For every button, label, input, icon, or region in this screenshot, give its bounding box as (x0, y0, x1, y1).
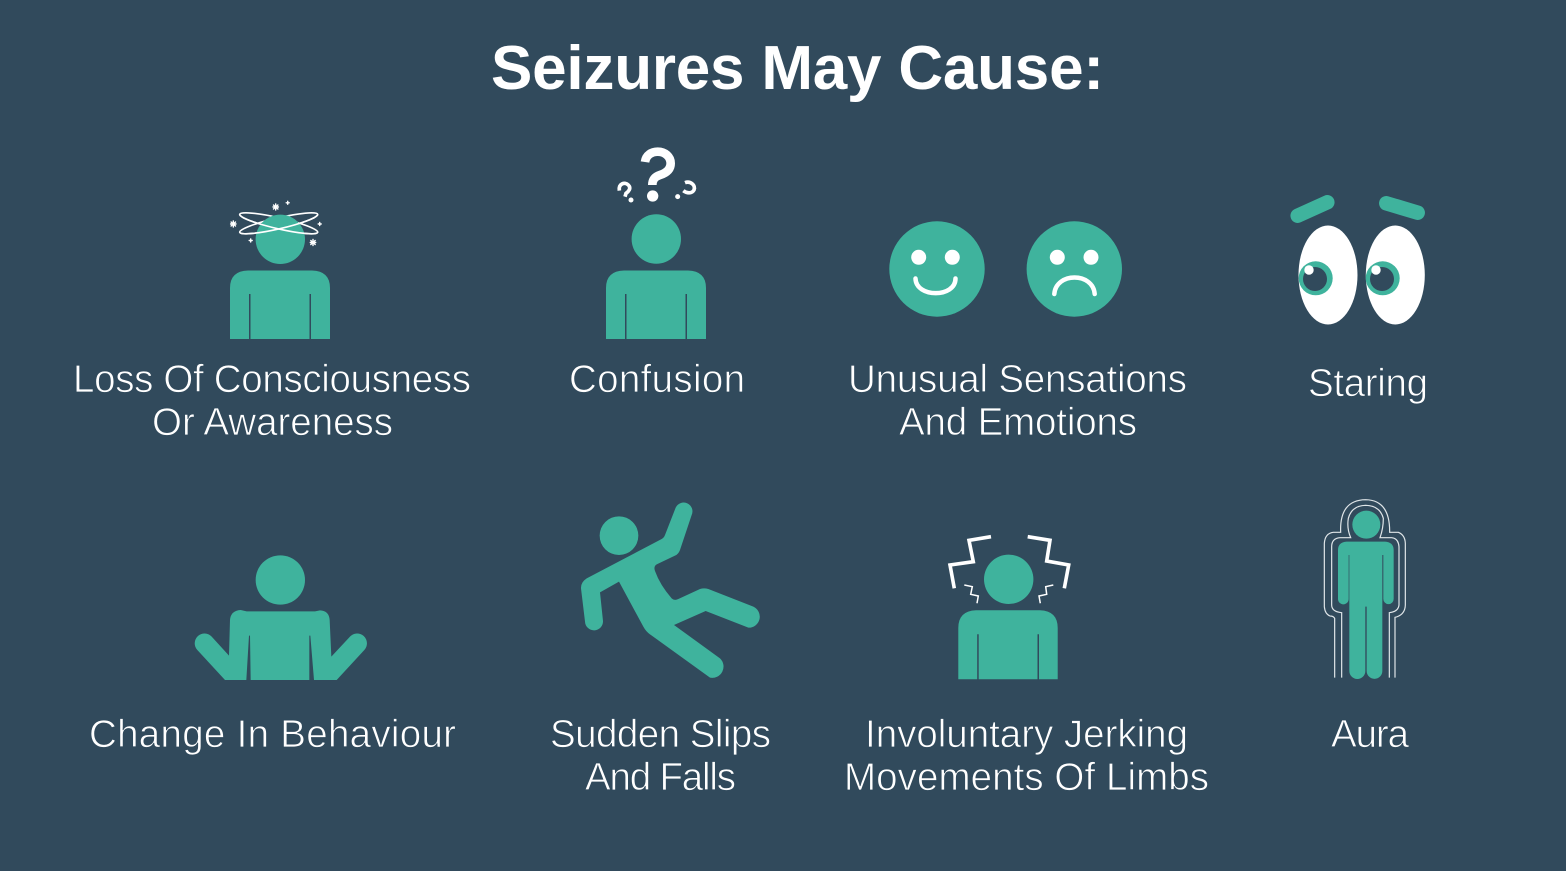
label: sudden slips and falls (550, 713, 771, 799)
panel: loss of consciousness (73, 201, 471, 444)
panel: aura (1324, 500, 1410, 756)
icon: person with aura outline (1324, 500, 1405, 679)
panel: unusual sensations (848, 221, 1187, 444)
label: loss of consciousness (73, 358, 471, 444)
icon: falling person (581, 503, 760, 678)
label: loss of consciousness: Loss Of Consciousness (73, 358, 471, 401)
icon: staring eyes (1298, 202, 1425, 324)
label: change in behaviour: Change In Behaviour (89, 713, 456, 756)
panel: confusion (569, 152, 745, 401)
label: confusion: Confusion (569, 358, 745, 401)
title: Seizures May Cause: (491, 34, 1104, 103)
icon: happy and sad faces (889, 221, 1122, 317)
icon: shrugging person (195, 555, 367, 680)
label: aura: Aura (1331, 713, 1410, 756)
label: involuntary jerking: Movements Of Limbs (844, 756, 1209, 799)
label: sudden slips and falls: Sudden Slips (550, 713, 771, 756)
label: loss of consciousness: Or Awareness (152, 401, 393, 444)
label: involuntary jerking (844, 713, 1209, 799)
label: unusual sensations: Unusual Sensations (848, 358, 1187, 401)
panel: staring (1298, 202, 1428, 405)
icon: person with jolts (950, 537, 1069, 679)
label: involuntary jerking: Involuntary Jerking (865, 713, 1188, 756)
icon: person with question marks (606, 152, 706, 339)
panel: involuntary jerking (844, 537, 1209, 799)
label: staring: Staring (1308, 362, 1428, 405)
label: sudden slips and falls: And Falls (585, 756, 736, 799)
label: unusual sensations (848, 358, 1187, 444)
icon: person with dizzy head (230, 201, 330, 339)
panel: change in behaviour (89, 555, 456, 756)
panel: sudden slips and falls (550, 503, 771, 799)
label: unusual sensations: And Emotions (899, 401, 1137, 444)
